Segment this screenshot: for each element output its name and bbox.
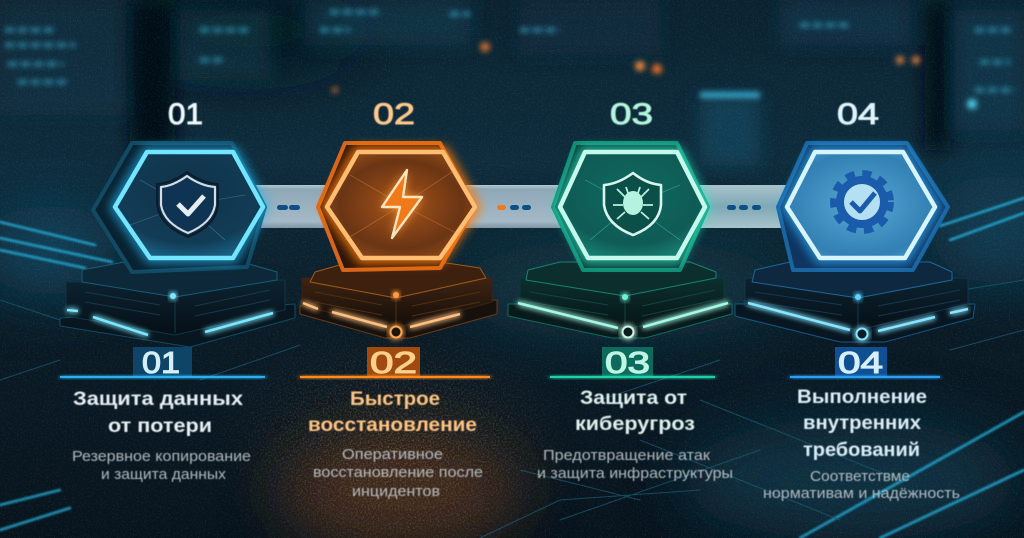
heading 1	[73, 389, 243, 437]
card 2 text	[300, 345, 490, 500]
pedestal 4	[735, 262, 975, 342]
heading 4: внутренних	[803, 413, 921, 434]
heading 3: Защита от	[580, 388, 687, 409]
number badge 02	[300, 345, 490, 380]
card 3 text	[537, 345, 733, 482]
description 2	[313, 447, 483, 500]
hexagon 3: cyber threats	[553, 143, 708, 270]
status ring 2	[390, 326, 402, 338]
heading 4: требований	[803, 440, 920, 461]
description 4: нормативам и надёжность	[763, 486, 960, 502]
card 4 text	[763, 345, 960, 502]
icon: lightning bolt	[382, 170, 422, 238]
number badge 01: 01	[142, 345, 180, 380]
number badge 04: 04	[838, 345, 883, 380]
description 2: инцидентов	[352, 484, 440, 500]
card 1 text	[60, 345, 265, 483]
hexagon 2: fast recovery	[318, 143, 475, 270]
description 3	[537, 448, 733, 482]
pedestal 1	[60, 260, 295, 347]
description 1	[72, 449, 251, 483]
pedestal 2	[300, 262, 497, 338]
description 1: и защита данных	[101, 467, 227, 483]
description 3: Предотвращение атак	[543, 448, 711, 464]
heading 1: Защита данных	[73, 389, 243, 410]
number badge 04	[790, 345, 940, 380]
number badge 01	[60, 345, 265, 380]
heading 4: Выполнение	[797, 387, 927, 408]
description 4	[763, 469, 960, 502]
icon: shield with check	[157, 172, 218, 237]
heading 1: от потери	[108, 416, 212, 437]
description 2: восстановление после	[313, 465, 483, 481]
heading 4	[797, 387, 927, 461]
top number 03: 03	[610, 98, 653, 131]
heading 2	[308, 389, 477, 436]
icon: gear with check	[834, 174, 890, 230]
top number 04: 04	[837, 98, 879, 131]
number badge 03	[550, 345, 715, 380]
hexagon 4: compliance	[778, 143, 948, 270]
description 4: Соответствме	[810, 469, 910, 485]
number badge 02: 02	[370, 345, 417, 380]
status ring 4	[856, 328, 868, 340]
description 3: и защита инфраструктуры	[537, 466, 733, 482]
number badge 03: 03	[605, 345, 650, 380]
hexagon 1: data protection	[93, 143, 265, 272]
top number 01: 01	[168, 98, 203, 131]
heading 3	[575, 388, 695, 435]
icon: shield with bug	[604, 173, 661, 235]
description 2: Оперативное	[342, 447, 443, 463]
top number 02: 02	[373, 98, 415, 131]
heading 3: киберугроз	[575, 414, 695, 435]
connector bars between hexagons	[255, 185, 795, 228]
heading 2: восстановление	[308, 415, 477, 436]
status ring 3	[622, 326, 634, 338]
pedestal 3	[508, 262, 732, 338]
description 1: Резервное копирование	[72, 449, 251, 465]
heading 2: Быстрое	[350, 389, 440, 410]
